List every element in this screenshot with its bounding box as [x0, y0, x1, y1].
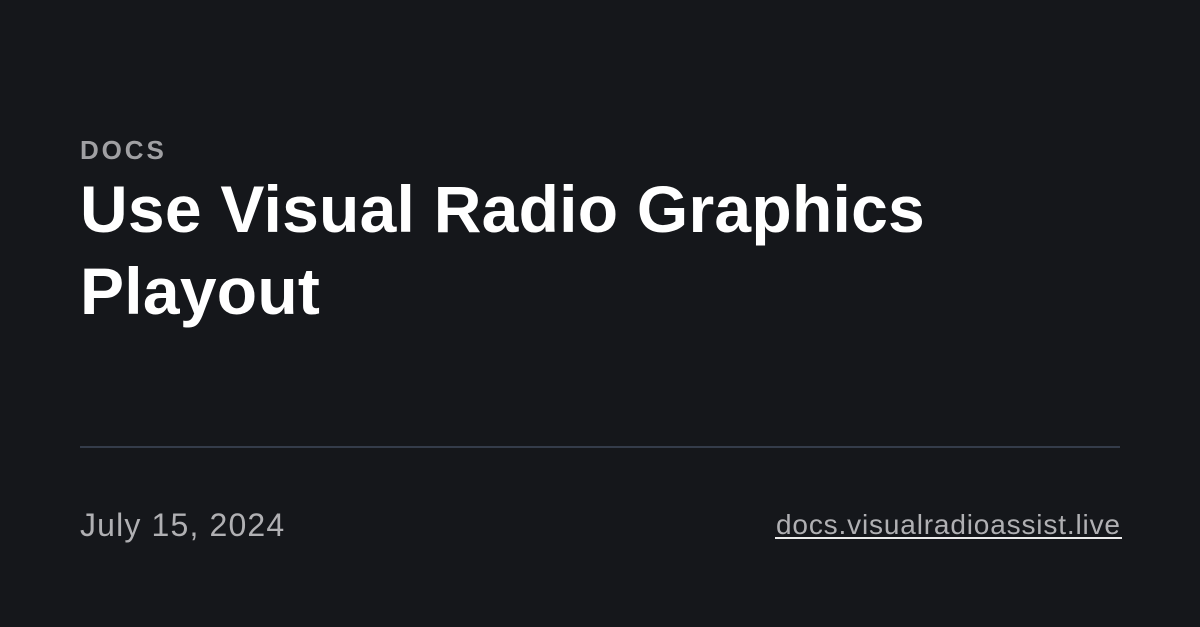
publication date: July 15, 2024	[80, 507, 285, 543]
title: Playout	[80, 254, 320, 328]
eyebrow label: DOCS: DOCS	[80, 135, 167, 165]
title	[80, 172, 925, 328]
site link: docs.visualradioassist.live	[776, 509, 1121, 540]
title: Use Visual Radio Graphics	[80, 172, 925, 246]
